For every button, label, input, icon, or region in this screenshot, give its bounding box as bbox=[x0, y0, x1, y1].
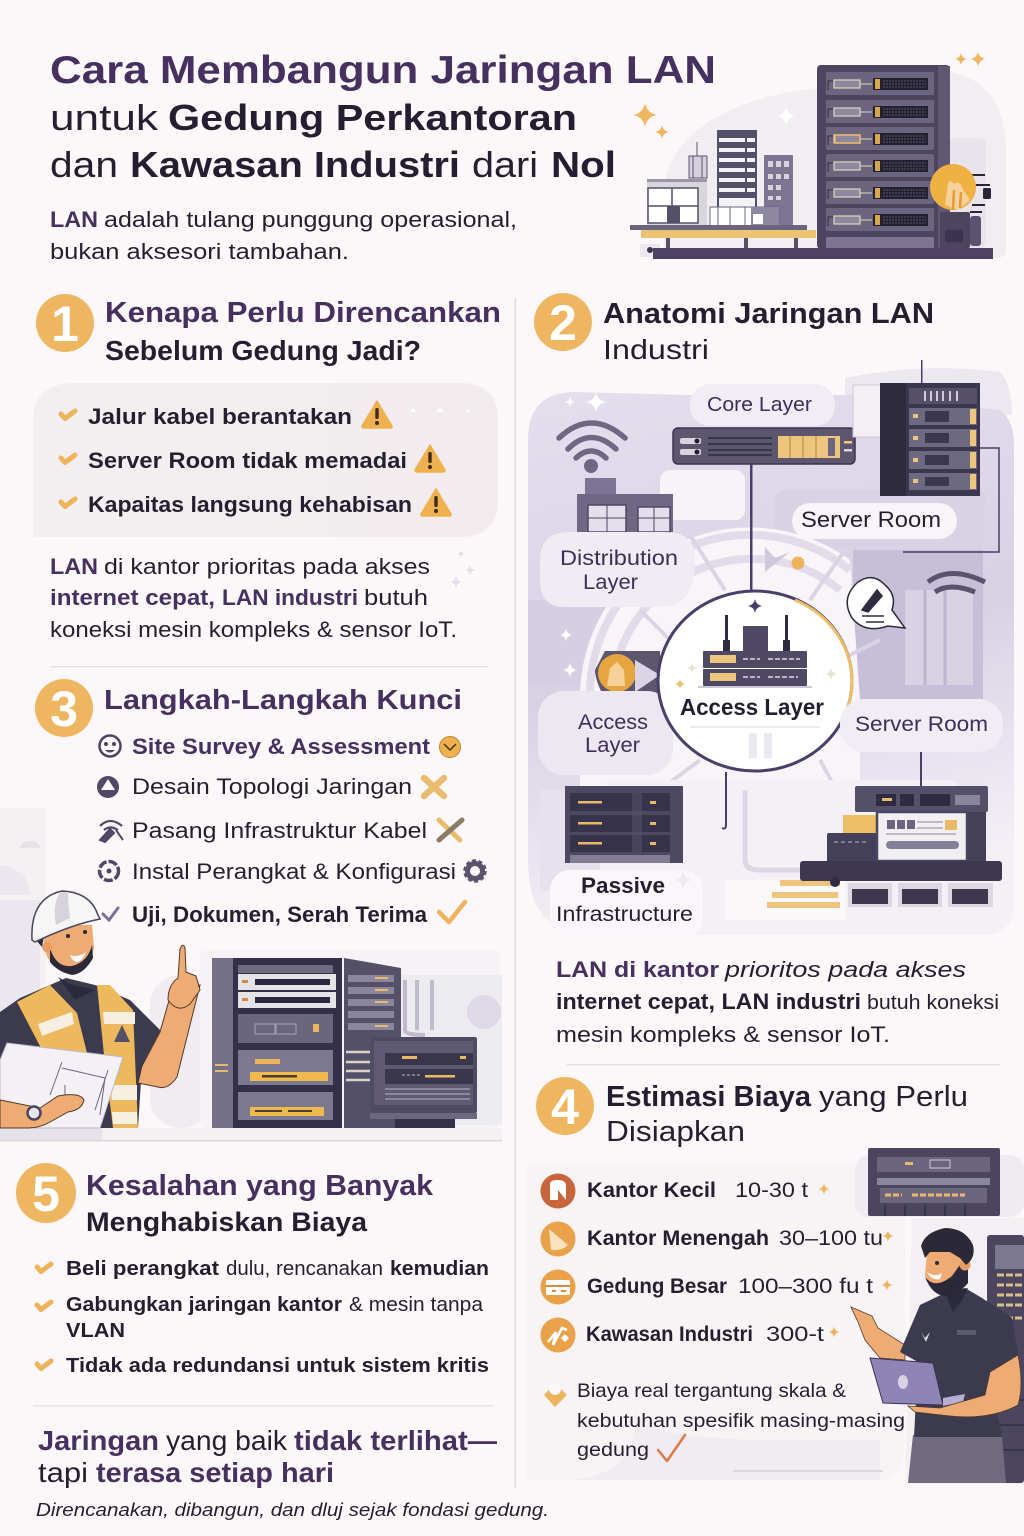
row: medium office bbox=[540, 1222, 894, 1256]
title bbox=[50, 49, 716, 185]
shirt bbox=[900, 1288, 1018, 1437]
passive infrastructure label bbox=[550, 870, 703, 938]
title: dari bbox=[472, 144, 538, 185]
heading 1: Sebelum Gedung Jadi? bbox=[105, 335, 421, 366]
paragraph: koneksi mesin kompleks & sensor IoT. bbox=[50, 617, 457, 642]
engineer bbox=[0, 891, 200, 1128]
title: Cara Membangun Jaringan LAN bbox=[50, 49, 716, 92]
mistakes list: Tidak ada redundansi untuk sistem kritis bbox=[66, 1354, 489, 1377]
heading 5: Kesalahan yang Banyak bbox=[86, 1170, 434, 1202]
section 1: why plan early bbox=[33, 294, 501, 642]
mistakes list: Gabungkan jaringan kantor bbox=[66, 1293, 342, 1316]
server rack bbox=[853, 360, 999, 552]
title: untuk bbox=[50, 97, 159, 138]
connectors lower bbox=[722, 752, 921, 829]
step: cabling: Pasang Infrastruktur Kabel bbox=[132, 818, 427, 843]
number badge 2 bbox=[534, 293, 592, 351]
closing statement: Jaringan bbox=[38, 1425, 159, 1456]
title: Kawasan Industri bbox=[130, 144, 460, 185]
column divider bbox=[514, 298, 516, 1488]
hair bbox=[921, 1228, 974, 1265]
closing tagline: Direncanakan, dibangun, dan dluj sejak fondasi gedung. bbox=[36, 1499, 549, 1520]
presenter with laptop bbox=[851, 1228, 1021, 1483]
row: large building: 100–300 fu t bbox=[738, 1275, 873, 1298]
step: site survey: Site Survey & Assessment bbox=[132, 734, 431, 759]
backdrop bbox=[0, 808, 502, 1142]
paragraph: butuh bbox=[364, 585, 428, 610]
header illustration: server rack and office buildings bbox=[630, 52, 1006, 259]
heading 5 bbox=[86, 1170, 434, 1237]
access layer hub bbox=[658, 591, 852, 771]
problem checklist panel: Jalur kabel berantakan bbox=[88, 404, 352, 429]
server room label right: Server Room bbox=[855, 713, 988, 736]
row: large building bbox=[540, 1270, 892, 1304]
rack behind presenter bbox=[987, 1235, 1024, 1483]
cost note: kebutuhan spesifik masing-masing bbox=[577, 1410, 905, 1432]
pointing arm bbox=[851, 1307, 905, 1360]
distribution layer label: Layer bbox=[583, 571, 638, 594]
access layer hub: Access Layer bbox=[680, 694, 824, 720]
step: testing and handover: Uji, Dokumen, Serah Terima bbox=[132, 902, 428, 927]
row: small office: 10-30 t bbox=[735, 1179, 808, 1202]
diagram background bbox=[528, 368, 1014, 935]
mistakes list: kemudian bbox=[390, 1257, 489, 1280]
building bbox=[577, 478, 673, 532]
core layer label bbox=[690, 384, 835, 426]
passive rack bbox=[565, 786, 683, 863]
router bbox=[698, 615, 812, 688]
mistakes list: VLAN bbox=[66, 1319, 125, 1342]
paragraph bbox=[50, 554, 457, 642]
heading 4: yang Perlu bbox=[819, 1081, 968, 1113]
mistakes list: Beli perangkat bbox=[66, 1257, 219, 1280]
heading 2: Anatomi Jaringan LAN bbox=[603, 298, 934, 330]
heading 3: Langkah-Langkah Kunci bbox=[104, 684, 462, 715]
row: industrial estate bbox=[540, 1318, 840, 1352]
core switch bbox=[673, 428, 855, 464]
section 5: common mistakes bbox=[16, 1163, 489, 1377]
blueprint bbox=[0, 1043, 123, 1128]
lightbulb device bbox=[930, 164, 991, 248]
paragraph: office vs industrial bbox=[556, 957, 999, 1047]
subtitle: adalah tulang punggung operasional, bbox=[104, 207, 517, 232]
section 3: key steps bbox=[35, 679, 486, 927]
heading 4: Disiapkan bbox=[606, 1116, 745, 1148]
number badge 5 bbox=[16, 1163, 76, 1223]
pointing arm bbox=[138, 985, 200, 1088]
arc with spokes bbox=[580, 527, 860, 800]
cost panel bbox=[527, 1155, 1024, 1484]
orange module icon bbox=[595, 651, 660, 697]
cost rows bbox=[540, 1174, 894, 1352]
subtitle: bukan aksesori tambahan. bbox=[50, 239, 349, 264]
base bbox=[653, 248, 993, 259]
server room label top bbox=[792, 503, 957, 539]
row: medium office: Kantor Menengah bbox=[587, 1227, 769, 1250]
row: industrial estate: 300-t bbox=[766, 1323, 824, 1346]
row: large building: Gedung Besar bbox=[587, 1275, 727, 1298]
heading 4: Estimasi Biaya bbox=[606, 1081, 812, 1113]
monitor unit bbox=[370, 1037, 477, 1128]
distribution layer label: Distribution bbox=[560, 547, 678, 570]
server room label top: Server Room bbox=[801, 507, 941, 532]
heading 1 bbox=[105, 297, 501, 366]
row: small office: Kantor Kecil bbox=[587, 1179, 716, 1202]
server room label right bbox=[840, 699, 1003, 752]
rack bbox=[817, 65, 950, 249]
paragraph: office vs industrial: butuh koneksi bbox=[867, 992, 999, 1014]
section 4: cost estimate bbox=[527, 1077, 1024, 1484]
heading 4 bbox=[606, 1081, 968, 1148]
paragraph: internet cepat, bbox=[50, 585, 215, 610]
paragraph: office vs industrial: mesin kompleks & sensor IoT. bbox=[556, 1022, 890, 1047]
workstation and patch panel bbox=[767, 786, 1002, 908]
heading 5: Menghabiskan Biaya bbox=[86, 1207, 368, 1237]
passive infrastructure label: Infrastructure bbox=[556, 903, 693, 926]
subtitle: LAN bbox=[50, 207, 98, 232]
connector: core to access bbox=[750, 464, 752, 592]
access layer label left bbox=[538, 691, 673, 775]
mistakes list: & mesin tanpa bbox=[349, 1293, 484, 1316]
problem checklist panel: Server Room tidak memadai bbox=[88, 448, 407, 473]
paragraph: office vs industrial: prioritos pada akses bbox=[724, 957, 966, 982]
rack bbox=[212, 958, 401, 1128]
number badge 1 bbox=[36, 294, 94, 352]
icon: sparkle stars bbox=[633, 52, 986, 139]
closing statement: yang baik bbox=[166, 1425, 287, 1456]
paragraph: office vs industrial: LAN di kantor bbox=[556, 957, 719, 982]
step: topology design: Desain Topologi Jaringan bbox=[132, 774, 412, 799]
number badge 3: 3 bbox=[50, 681, 78, 737]
row: small office bbox=[540, 1174, 830, 1208]
deck bbox=[630, 225, 807, 230]
section 2: LAN anatomy bbox=[534, 293, 934, 365]
cost note: Biaya real tergantung skala & bbox=[577, 1380, 846, 1402]
paragraph: office vs industrial: internet cepat, LAN industri bbox=[556, 989, 861, 1014]
speech bubble icon bbox=[847, 578, 905, 629]
cost note: gedung bbox=[577, 1439, 649, 1461]
paragraph: di kantor prioritas pada akses bbox=[104, 554, 430, 579]
access layer label left: Layer bbox=[585, 734, 640, 757]
row: medium office: 30–100 tu bbox=[779, 1227, 883, 1250]
access layer label left: Access bbox=[578, 711, 648, 734]
number badge 5: 5 bbox=[32, 1166, 60, 1222]
head bbox=[925, 1240, 968, 1295]
holding hand bbox=[0, 1095, 84, 1128]
illustration: engineer with server rack bbox=[0, 808, 502, 1142]
core layer label: Core Layer bbox=[707, 393, 812, 416]
wifi icon bbox=[559, 423, 625, 473]
mistakes list bbox=[37, 1257, 489, 1377]
buildings bbox=[647, 130, 793, 227]
server top right bbox=[868, 1148, 1000, 1216]
subtitle bbox=[50, 207, 517, 264]
number badge 4: 4 bbox=[551, 1079, 579, 1135]
heading 2: Industri bbox=[603, 334, 709, 365]
title: Gedung Perkantoran bbox=[168, 97, 577, 138]
number badge 3 bbox=[35, 679, 93, 737]
closing statement: tidak terlihat— bbox=[294, 1425, 498, 1456]
number badge 2: 2 bbox=[549, 295, 577, 351]
network layers diagram bbox=[528, 360, 1014, 938]
title: Nol bbox=[551, 144, 616, 185]
problem checklist panel: Kapaitas langsung kehabisan bbox=[88, 492, 412, 517]
head bbox=[42, 925, 94, 972]
problem checklist panel bbox=[33, 383, 498, 537]
step: device install: Instal Perangkat & Konfigurasi bbox=[132, 859, 456, 884]
laptop bbox=[870, 1358, 943, 1405]
closing statement bbox=[38, 1425, 498, 1488]
title: dan bbox=[50, 144, 118, 185]
closing statement: tapi bbox=[38, 1457, 88, 1488]
paragraph: LAN bbox=[50, 554, 98, 579]
heading 2 bbox=[603, 298, 934, 365]
row: industrial estate: Kawasan Industri bbox=[586, 1323, 753, 1346]
distribution layer label bbox=[540, 532, 695, 607]
number badge 1: 1 bbox=[51, 296, 79, 352]
cost note bbox=[544, 1380, 905, 1461]
shirt bbox=[0, 978, 165, 1128]
hard hat bbox=[32, 891, 100, 942]
passive infrastructure label: Passive bbox=[581, 873, 665, 898]
lower arm bbox=[908, 1355, 1021, 1417]
pants bbox=[908, 1435, 1006, 1483]
mistakes list: dulu, rencanakan bbox=[226, 1257, 383, 1280]
heading 1: Kenapa Perlu Direncankan bbox=[105, 297, 501, 329]
number badge 4 bbox=[536, 1077, 594, 1135]
paragraph: LAN industri bbox=[222, 585, 358, 610]
closing statement: terasa setiap hari bbox=[96, 1457, 334, 1488]
safety vest bbox=[17, 985, 87, 1128]
